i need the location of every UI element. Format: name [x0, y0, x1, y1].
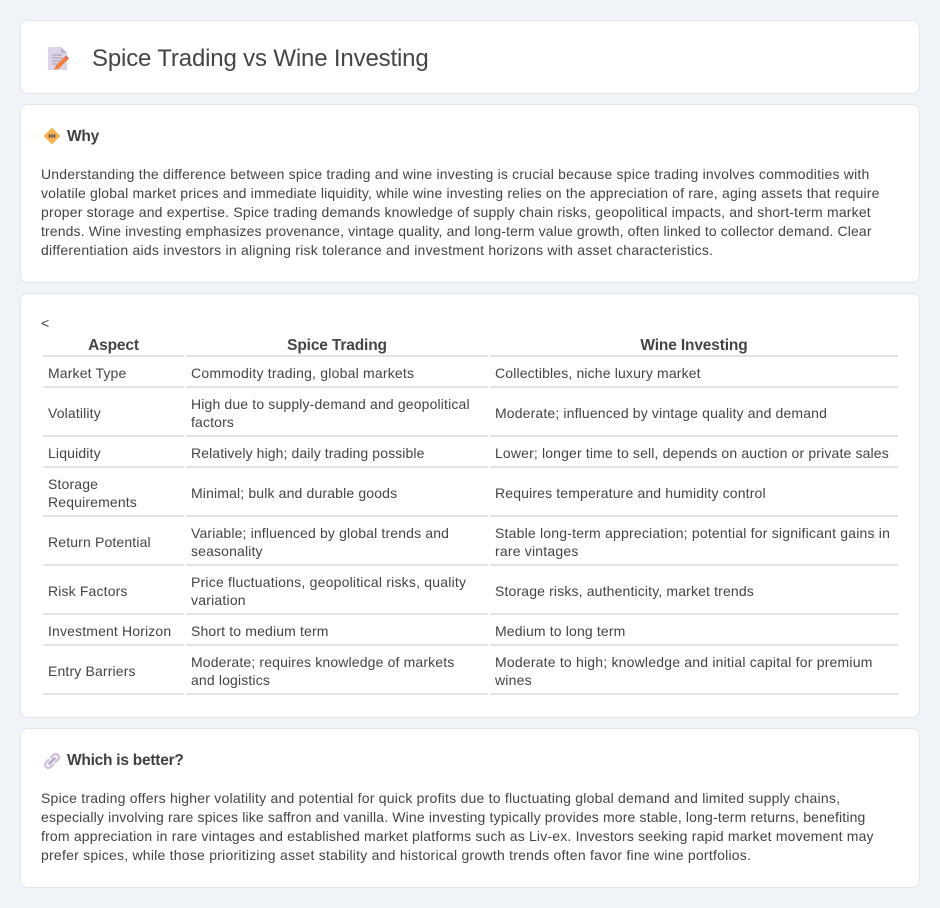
comparison table: factors: [191, 414, 234, 430]
comparison table: Moderate; requires knowledge of markets: [191, 654, 454, 670]
stray character: <: [41, 315, 49, 331]
comparison table: Short to medium term: [191, 622, 329, 638]
text block: which is better: Spice trading offers higher volatility and potential for quick profits due to fluctuating global demand and limited supply chains,: [41, 790, 840, 806]
text block: which is better: from appreciation in rare vintages and established market platforms such as Liv-ex. Investors seeking rapid market movement may: [41, 828, 874, 844]
comparison table: Variable; influenced by global trends and: [191, 524, 449, 540]
comparison table: Price fluctuations, geopolitical risks, quality: [191, 574, 466, 590]
comparison table: Moderate to high; knowledge and initial capital for premium: [495, 654, 873, 670]
comparison table: Relatively high; daily trading possible: [191, 444, 424, 460]
comparison table: Lower; longer time to sell, depends on auction or private sales: [495, 444, 889, 460]
comparison table: Entry Barriers: [48, 662, 136, 678]
comparison table: Commodity trading, global markets: [191, 364, 414, 380]
heading: which is better: Which is better?: [67, 752, 184, 769]
comparison table: Market Type: [48, 364, 126, 380]
comparison table: Collectibles, niche luxury market: [495, 364, 701, 380]
comparison table: Liquidity: [48, 444, 101, 460]
icon: warning diamond: [44, 128, 60, 144]
comparison table: and logistics: [191, 672, 270, 688]
comparison table: Moderate; influenced by vintage quality and demand: [495, 404, 827, 420]
comparison table: variation: [191, 592, 246, 608]
comparison table: Volatility: [48, 404, 101, 420]
icon: document with pencil: [48, 47, 69, 70]
text block: why: volatile global market prices and immediate liquidity, while wine investing relies on the appreciation of rare, aging assets that require: [41, 185, 880, 201]
comparison table: Minimal; bulk and durable goods: [191, 484, 397, 500]
text block: why: proper storage and expertise. Spice trading demands knowledge of supply chain risks, geopolitical impacts, and short-term market: [41, 204, 871, 220]
icon: chain link: [44, 752, 60, 770]
panel: which is better: [20, 728, 920, 888]
text block: which is better: [41, 790, 874, 863]
text block: why: [41, 166, 880, 258]
text block: why: trends. Wine investing emphasizes provenance, vintage quality, and long-term value growth, often linked to collector demand. Clear: [41, 223, 872, 239]
comparison table: Spice Trading: [287, 337, 387, 354]
heading: why: Why: [67, 128, 99, 145]
comparison table: Storage: [48, 476, 98, 492]
comparison table: wines: [495, 672, 532, 688]
text block: which is better: especially involving rare spices like saffron and vanilla. Wine investing typically provides more stable, long-term returns, benefiting: [41, 809, 866, 825]
panel: comparison table: [20, 293, 920, 718]
comparison table: Requires temperature and humidity control: [495, 484, 766, 500]
comparison table: Risk Factors: [48, 582, 128, 598]
panel: why: [20, 104, 920, 283]
comparison table: Medium to long term: [495, 622, 625, 638]
text block: why: Understanding the difference between spice trading and wine investing is crucial because spice trading involves commodities with: [41, 166, 869, 182]
text block: why: differentiation aids investors in aligning risk tolerance and investment horizons with asset characteristics.: [41, 242, 713, 258]
comparison table: rare vintages: [495, 542, 579, 558]
comparison table: Storage risks, authenticity, market trends: [495, 582, 754, 598]
comparison table: seasonality: [191, 542, 263, 558]
comparison table: Return Potential: [48, 534, 151, 550]
comparison table: Aspect: [88, 337, 139, 354]
title card: [20, 20, 920, 94]
comparison table: High due to supply-demand and geopolitical: [191, 396, 470, 412]
title: Spice Trading vs Wine Investing: [92, 45, 429, 72]
comparison table: Stable long-term appreciation; potential for significant gains in: [495, 524, 890, 540]
text block: which is better: prefer spices, while those prioritizing asset stability and historical growth trends often favor fine wine portfolios.: [41, 847, 751, 863]
comparison table: Investment Horizon: [48, 622, 171, 638]
comparison table: Wine Investing: [640, 337, 748, 354]
comparison table: [43, 337, 898, 695]
comparison table: Requirements: [48, 494, 137, 510]
